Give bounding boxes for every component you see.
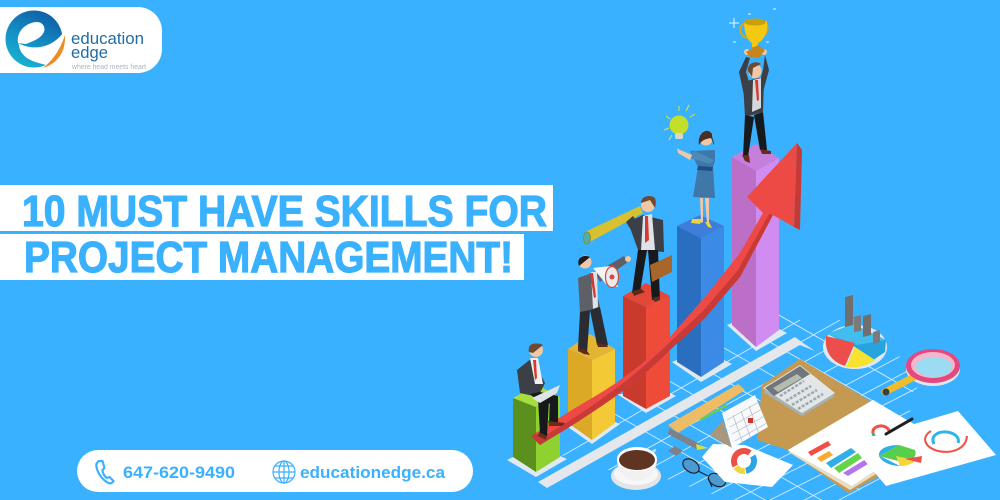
rising red arrow xyxy=(531,143,802,445)
base plates xyxy=(507,323,787,477)
pen xyxy=(886,419,912,434)
chart paper: pie and donut xyxy=(850,411,996,486)
title: PROJECT MANAGEMENT! xyxy=(24,233,513,282)
logo wordmark xyxy=(71,29,146,71)
man with telescope and briefcase xyxy=(584,196,672,302)
icon: education edge swirl xyxy=(6,10,70,70)
3D pie chart with bars xyxy=(823,295,887,369)
bar: purple xyxy=(732,144,779,347)
calendar xyxy=(710,395,768,448)
ruler xyxy=(668,384,745,433)
bar: blue xyxy=(677,215,724,377)
calculator xyxy=(763,365,835,416)
title: 10 MUST HAVE SKILLS FOR xyxy=(22,187,547,236)
logo wordmark: education xyxy=(71,29,144,48)
icon: globe xyxy=(273,461,295,483)
logo wordmark: where head meets heart xyxy=(71,64,146,71)
title xyxy=(0,185,553,282)
bar: yellow xyxy=(568,334,615,440)
floor grid xyxy=(562,314,918,500)
man holding trophy xyxy=(739,49,771,163)
website: educationedge.ca xyxy=(300,463,446,482)
floor strip xyxy=(538,337,815,488)
icon: phone xyxy=(96,461,114,483)
highlighter xyxy=(668,428,708,450)
man sitting with laptop xyxy=(517,343,565,440)
man with megaphone xyxy=(578,256,631,355)
contact pill xyxy=(77,450,473,492)
logo panel xyxy=(0,7,162,73)
illustration: growth chart scene xyxy=(507,9,1000,500)
icon: trophy xyxy=(729,9,776,58)
chart paper: left xyxy=(702,444,793,487)
woman with light bulb xyxy=(677,131,715,228)
document folder xyxy=(757,359,878,493)
green pencil xyxy=(700,405,727,420)
bar: green xyxy=(513,385,560,472)
icon: light bulb xyxy=(664,105,695,140)
coffee cup xyxy=(611,447,661,490)
bar: red xyxy=(623,283,670,409)
phone number: 647-620-9490 xyxy=(123,463,235,482)
eraser xyxy=(668,446,683,456)
chart paper: bar chart xyxy=(788,400,915,490)
magnifying glass xyxy=(882,349,960,396)
logo wordmark: edge xyxy=(71,43,108,62)
glasses xyxy=(680,456,728,489)
